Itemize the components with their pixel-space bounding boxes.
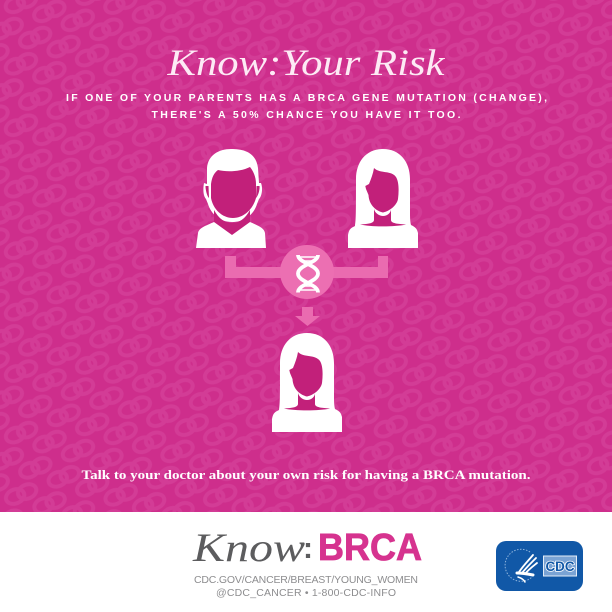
icon: DNA circle [280,245,334,299]
arrow down [295,307,320,326]
footer contact text [194,574,418,599]
logo: Know BRCA: : [303,532,313,565]
icon: mother [348,149,418,248]
logo: CDC: CDC [546,558,574,574]
subtitle text block: IF ONE OF YOUR PARENTS HAS A BRCA GENE MUTATION (CHANGE), [66,92,547,104]
logo: Know BRCA: Know [192,525,305,570]
logo: CDC [496,541,583,591]
logo: Know BRCA: BRCA [318,527,422,569]
icon: father [196,149,266,248]
logo: Know BRCA [192,525,422,570]
footer contact text: CDC.GOV/CANCER/BREAST/YOUNG_WOMEN [194,574,418,586]
connector lines from parents [225,256,388,278]
icon: child [272,333,342,432]
subtitle text block [66,92,547,121]
title: Know:Your Risk [166,43,445,84]
subtitle text block: THERE'S A 50% CHANCE YOU HAVE IT TOO. [152,109,461,121]
call to action text: Talk to your doctor about your own risk for having a BRCA mutation. [82,467,530,482]
panel: white footer [0,512,612,612]
footer contact text: @CDC_CANCER • 1-800-CDC-INFO [216,587,396,599]
